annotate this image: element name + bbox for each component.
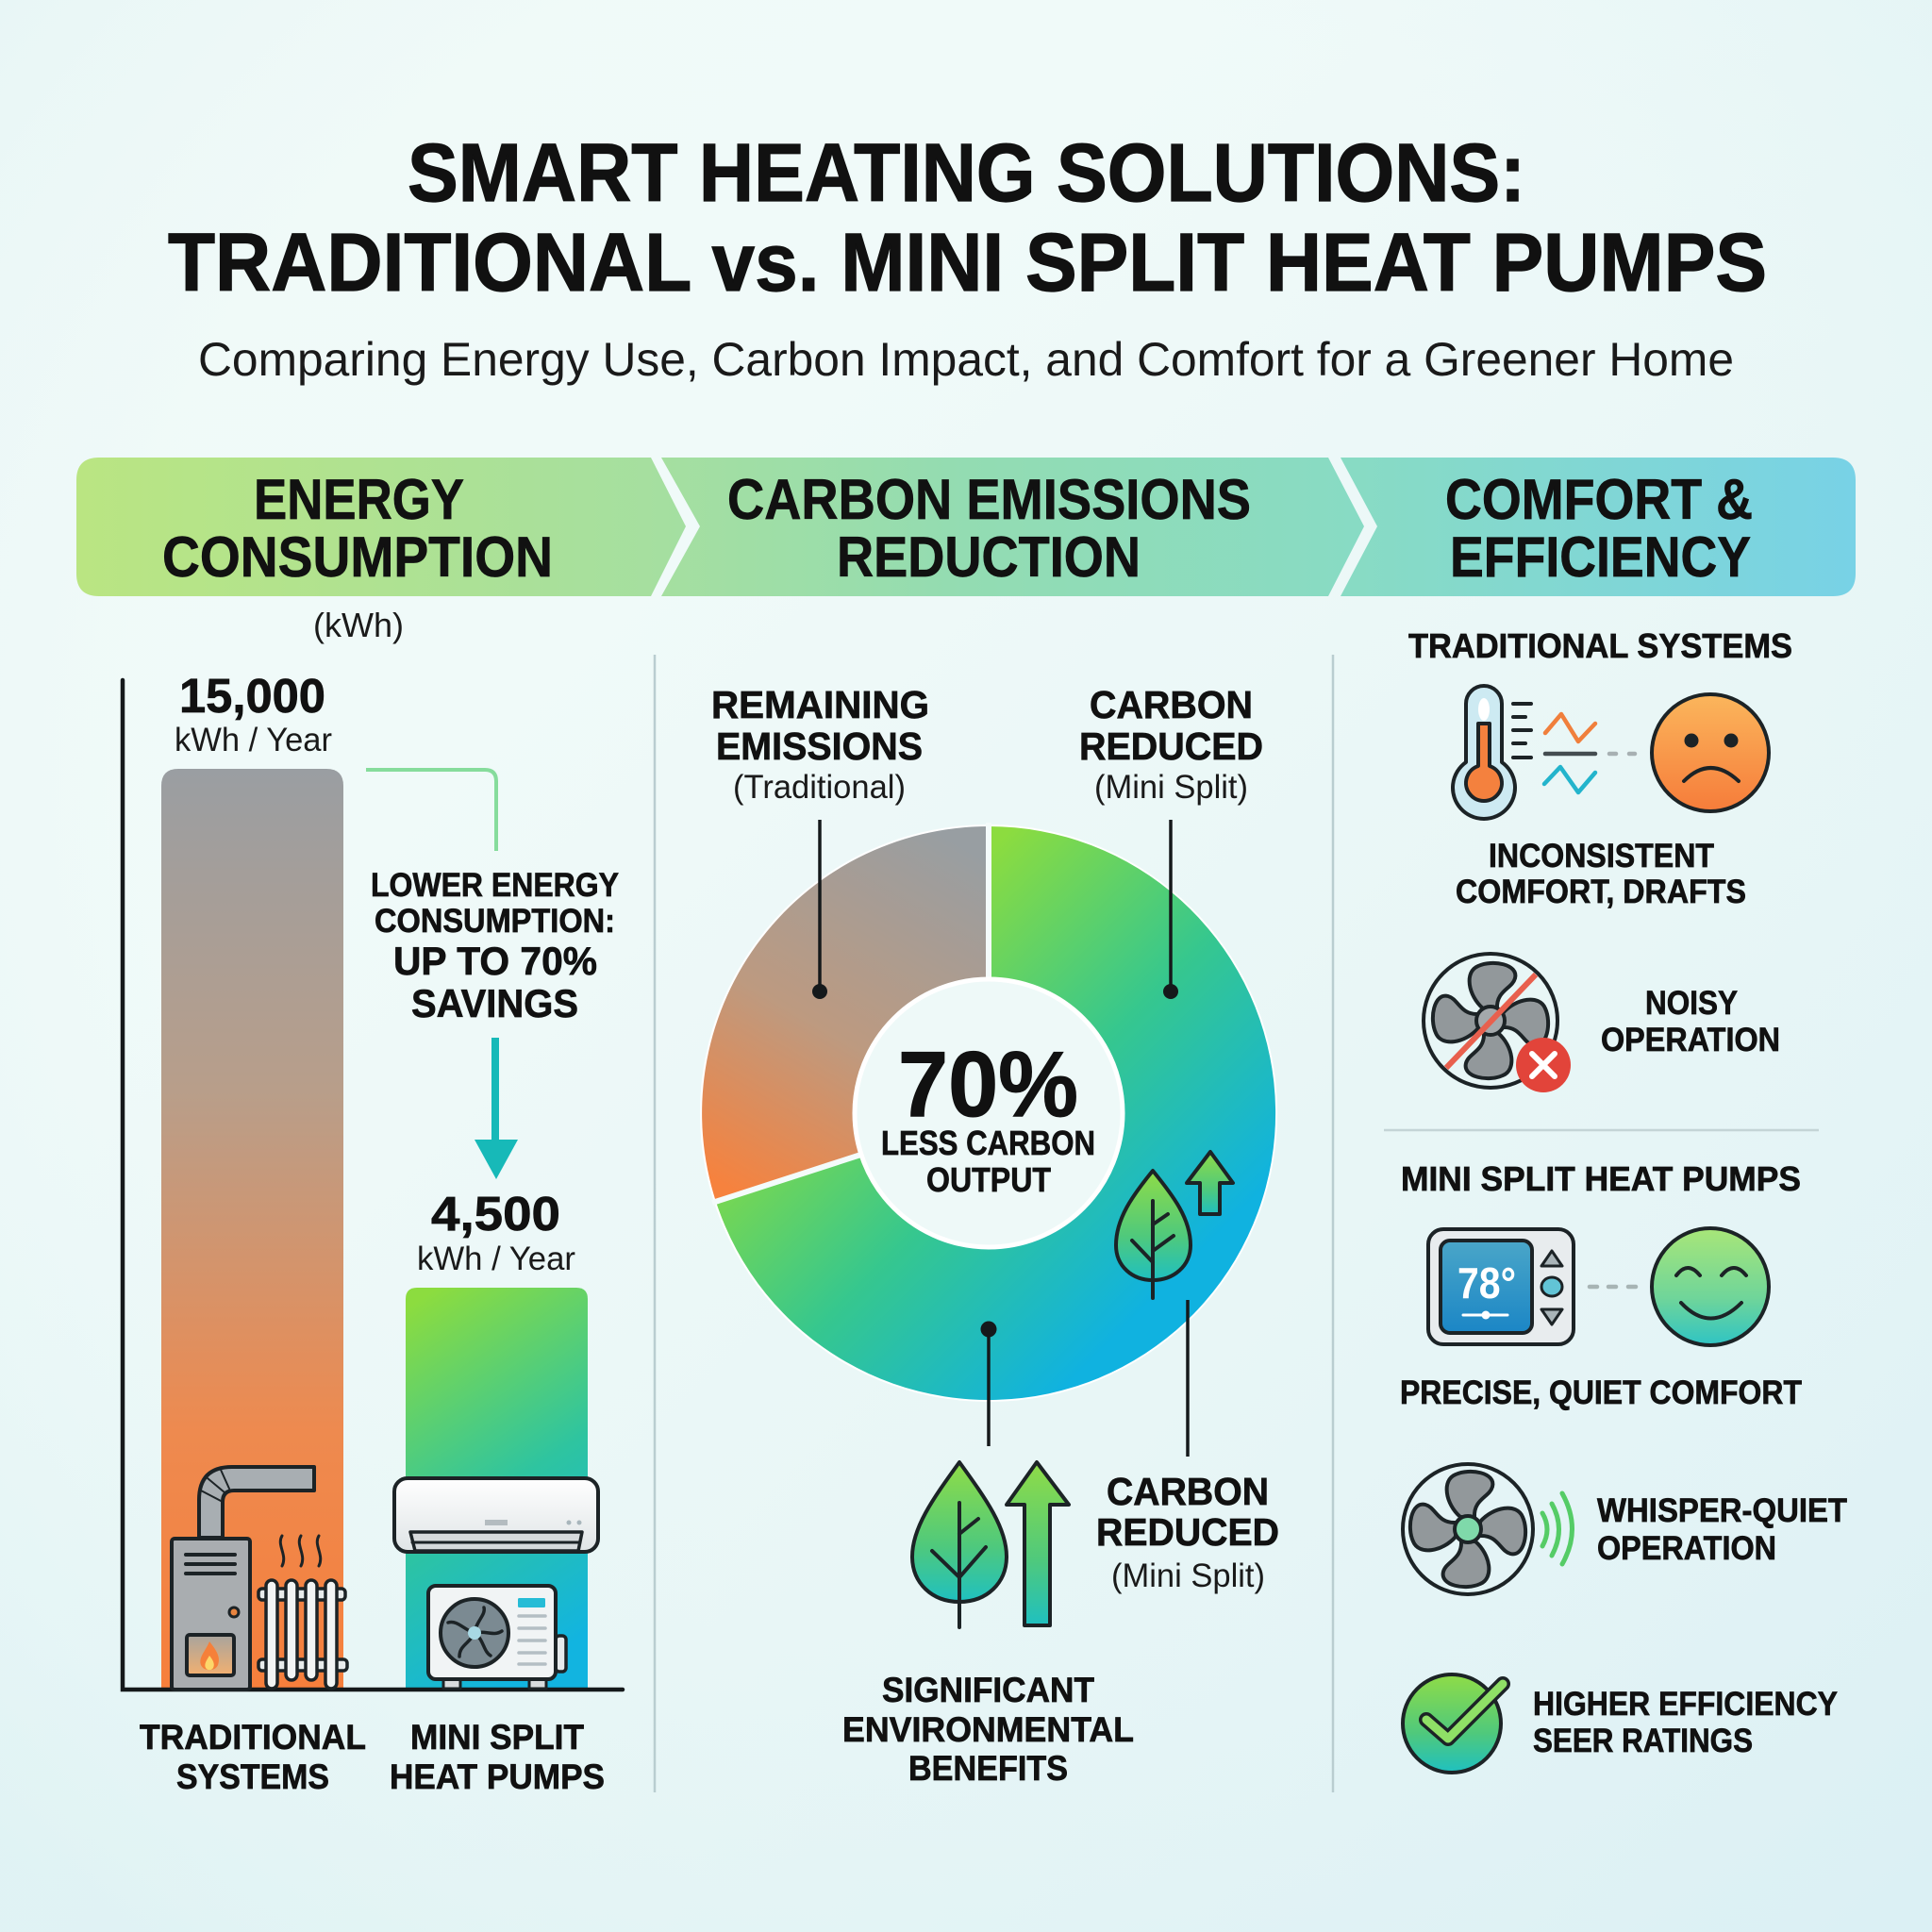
panel: carbon donut chart [700,683,1279,1788]
label: noisy operation [1601,985,1780,1058]
column divider right [1332,655,1334,1792]
icon: thermometer [1453,686,1531,819]
subtitle: Comparing Energy Use, Carbon Impact, and Comfort for a Greener Home [198,333,1734,386]
bar: mini split [406,1288,588,1689]
label: whisper quiet [1597,1492,1847,1567]
label: carbon reduced: REDUCED [1079,724,1263,768]
label: environmental benefits: SIGNIFICANT [882,1671,1094,1709]
icon: indoor mini split unit [394,1478,598,1552]
banner segment: comfort and efficiency [1341,458,1856,596]
label: noisy operation: NOISY [1645,985,1738,1022]
title: TRADITIONAL vs. MINI SPLIT HEAT PUMPS [168,217,1767,308]
value: 15,000: 15,000 [179,669,325,723]
callout: savings [371,867,619,1025]
label: environmental benefits [842,1671,1134,1788]
label: noisy operation: OPERATION [1601,1022,1780,1058]
callout: savings: UP TO 70% [393,939,597,983]
donut slice: carbon reduced [716,826,1275,1400]
donut separators [712,823,989,1203]
connector dashes [1590,1285,1636,1289]
banner segment: energy consumption [76,458,686,596]
leader line: carbon reduced [1163,820,1178,999]
unit: kWh per year: kWh / Year [417,1241,575,1277]
unit: kWh per year: kWh / Year [175,722,332,758]
heading: mini split heat pumps: MINI SPLIT HEAT PUMPS [1401,1159,1801,1198]
banner label: comfort: EFFICIENCY [1450,525,1751,589]
heading: traditional systems: TRADITIONAL SYSTEMS [1408,626,1792,665]
label: higher efficiency: HIGHER EFFICIENCY [1533,1686,1838,1723]
banner label: energy: ENERGY [254,468,464,531]
icon: noisy fan [1424,954,1571,1092]
label: carbon reduced lower: CARBON [1107,1470,1269,1513]
unit label: (kWh) [313,606,404,644]
callout: savings: SAVINGS [411,981,578,1025]
callout: savings: CONSUMPTION: [375,903,615,940]
label: higher efficiency: SEER RATINGS [1533,1723,1753,1759]
banner label: comfort: COMFORT & [1445,468,1753,531]
category label: traditional systems: SYSTEMS [176,1757,329,1796]
panel: energy bar chart [123,669,623,1796]
leader line: benefits [981,1321,996,1446]
category label: traditional systems: TRADITIONAL [140,1718,366,1757]
banner label: carbon: REDUCTION [837,525,1141,589]
donut centre [855,979,1123,1247]
connector line [366,770,496,851]
label: remaining emissions: (Traditional) [733,769,906,806]
label: higher efficiency [1533,1686,1838,1759]
label: whisper quiet: OPERATION [1597,1530,1776,1567]
category label: mini split heat pumps [390,1718,605,1796]
icon: furnace [172,1467,314,1690]
label: carbon reduced lower: REDUCED [1096,1510,1279,1554]
leader line: remaining [812,820,827,999]
icon: happy face [1652,1228,1769,1345]
centre label: LESS CARBON [881,1124,1095,1162]
icon: thermostat: 78° [1457,1258,1516,1307]
icon: quiet fan [1403,1464,1572,1594]
label: carbon reduced lower [1096,1470,1279,1594]
bar: traditional systems [161,769,343,1689]
icon: large arrow [1007,1462,1069,1625]
arrow: down to mini split [475,1038,518,1179]
icon: small arrow [1187,1152,1233,1214]
icon: sad face [1652,694,1769,811]
divider [1384,1129,1819,1131]
label: precise quiet comfort: PRECISE, QUIET COMFORT [1400,1374,1802,1411]
column divider left [654,655,656,1792]
icon: radiator [258,1536,347,1689]
centre label: OUTPUT [926,1160,1051,1199]
donut backing ring [700,824,1277,1402]
category label: mini split heat pumps: HEAT PUMPS [390,1757,605,1796]
callout: savings: LOWER ENERGY [371,867,619,904]
category label: mini split heat pumps: MINI SPLIT [410,1718,584,1757]
banner label: carbon: CARBON EMISSIONS [727,468,1251,531]
category label: traditional systems [140,1718,366,1796]
label: carbon reduced: (Mini Split) [1094,769,1248,806]
banner segment: carbon emissions reduction [661,458,1364,596]
header banner [76,458,1856,596]
title: SMART HEATING SOLUTIONS: [408,127,1525,219]
label: remaining emissions: REMAINING [711,683,929,726]
icon: thermostat [1428,1229,1574,1344]
centre label [881,1124,1095,1199]
label: remaining emissions: EMISSIONS [716,724,923,768]
icon: checkmark badge [1403,1674,1503,1773]
label: environmental benefits: BENEFITS [908,1749,1068,1788]
label: inconsistent comfort [1456,838,1746,910]
centre value: 70% [898,1032,1078,1136]
label: remaining emissions [711,683,929,806]
leader line: carbon reduced lower [1186,1300,1190,1457]
chart axes [123,680,623,1690]
label: inconsistent comfort: COMFORT, DRAFTS [1456,874,1746,910]
value: 4,500: 4,500 [431,1187,560,1241]
icon: temperature swings [1544,714,1635,792]
icon: small leaf [1116,1171,1191,1298]
label: inconsistent comfort: INCONSISTENT [1489,838,1714,874]
icon: large leaf [912,1462,1007,1627]
donut slice: remaining emissions [702,826,989,1202]
label: carbon reduced [1079,683,1263,806]
label: environmental benefits: ENVIRONMENTAL [842,1710,1134,1749]
banner label: energy: CONSUMPTION [162,525,553,589]
label: carbon reduced: CARBON [1090,683,1253,726]
label: carbon reduced lower: (Mini Split) [1111,1557,1265,1594]
title [168,127,1767,308]
icon: outdoor mini split unit [428,1586,566,1689]
panel: comfort and efficiency [1384,626,1847,1773]
label: whisper quiet: WHISPER-QUIET [1597,1492,1847,1529]
